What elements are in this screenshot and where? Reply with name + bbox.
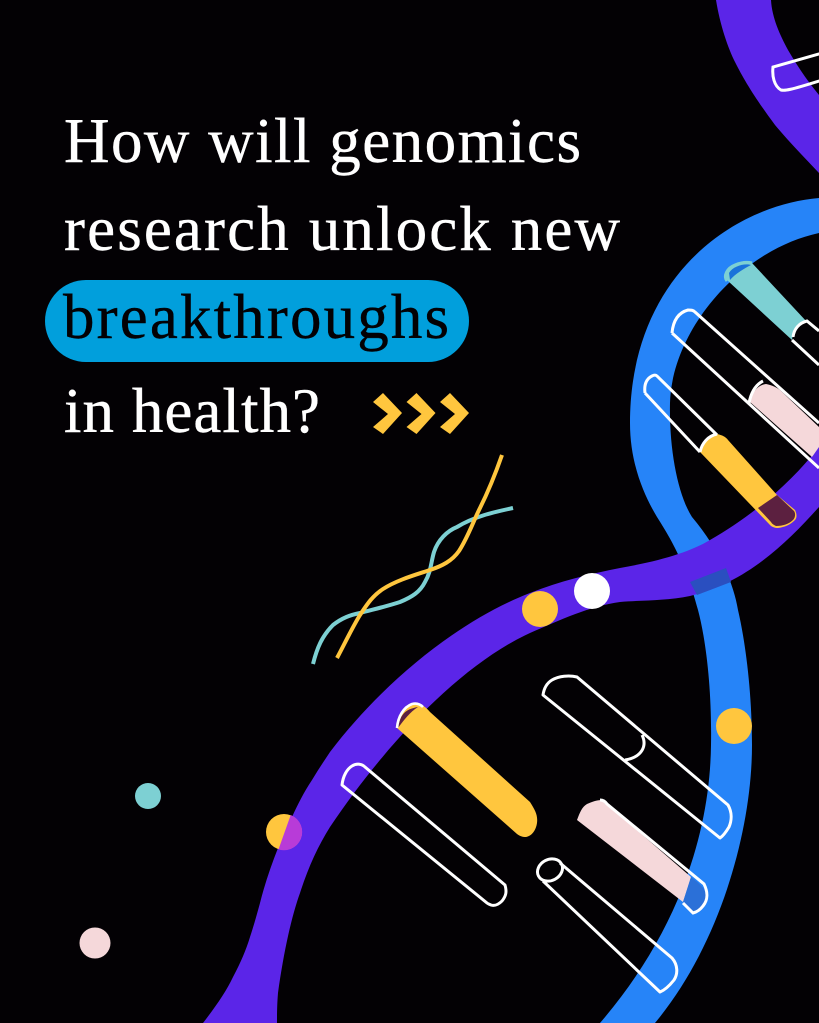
- top rung outline: [773, 54, 819, 90]
- icon: triple chevrons: [373, 393, 469, 434]
- dot: yellow on purple strand: [522, 591, 558, 627]
- dot: yellow on blue strand: [716, 708, 752, 744]
- highlight pill: [45, 280, 469, 362]
- dot: yellow with magenta overlap: [266, 814, 302, 850]
- rung: outline upper right: [543, 676, 731, 838]
- top purple strand: [716, 0, 819, 173]
- blue strand: [600, 198, 819, 1023]
- small yellow helix strand: [337, 455, 502, 658]
- heading line 1: How will genomics: [64, 106, 581, 176]
- purple strand: [203, 447, 819, 1023]
- heading line 3 highlighted: breakthroughs: [63, 282, 449, 352]
- dot: white: [574, 573, 610, 609]
- rung: outline bottom: [534, 855, 677, 992]
- rung: pink upper: [672, 310, 819, 468]
- rung: teal upper: [725, 262, 819, 365]
- strand overlap: [690, 568, 731, 595]
- small teal helix strand: [313, 508, 513, 664]
- heading line 4: in health?: [64, 376, 320, 446]
- rung: outline lower left: [342, 764, 506, 905]
- dot: pink: [80, 928, 110, 958]
- heading: [45, 106, 620, 446]
- rung: yellow lower: [397, 704, 537, 837]
- rung: pink lower: [577, 800, 707, 913]
- rung: yellow upper: [645, 375, 796, 528]
- heading line 2: research unlock new: [64, 194, 620, 264]
- dot: teal: [135, 783, 161, 809]
